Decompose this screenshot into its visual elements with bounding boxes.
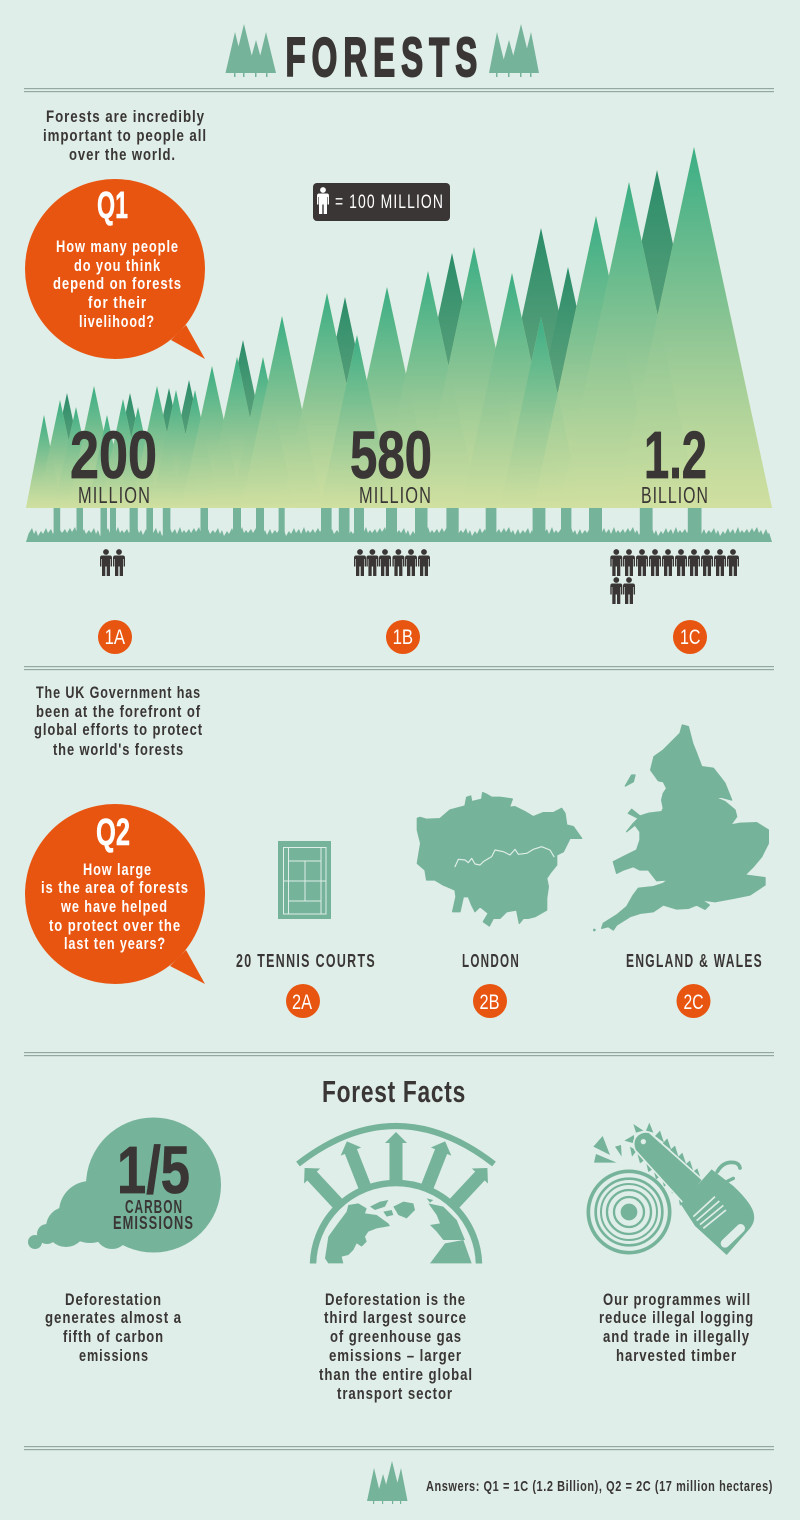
icon: carbon cloud: 1/5 [117,1133,190,1208]
question bubble Q2: to protect over the [49,916,181,935]
value 580 million: MILLION [359,482,432,508]
question bubble Q1: How many people [56,237,179,256]
fact text: greenhouse gas source: Deforestation is the [325,1290,466,1309]
fact text: greenhouse gas source: transport sector [337,1384,453,1403]
question bubble Q2: is the area of forests [41,878,189,897]
fact text: greenhouse gas source: of greenhouse gas [330,1327,462,1346]
option badge 2A: 2A [292,991,312,1014]
value 580 million: 580 [350,418,432,493]
people row 1C [610,549,739,604]
fact text: fifth of carbon emissions: generates almost a [45,1308,182,1327]
option badge 2B [473,984,507,1018]
label: London: LONDON [462,950,520,971]
icon: carbon cloud [28,1118,221,1252]
intro text: over the world. [69,145,176,164]
value 200 million: 200 [70,418,157,493]
fact text: fifth of carbon emissions: emissions [79,1346,149,1365]
UK government text: been at the forefront of [36,702,201,721]
question bubble Q2: we have helped [60,897,168,916]
option badge 1A [98,620,132,654]
forest chart [26,147,772,508]
icon: chainsaw and tree rings [588,1123,754,1255]
question bubble Q1: depend on forests [53,274,182,293]
question bubble Q2: last ten years? [64,934,166,953]
value 1.2 billion [641,418,709,508]
question bubble Q1: Q1 [97,185,128,227]
option badge 1B: 1B [393,626,413,649]
fact text: greenhouse gas source: third largest source [324,1308,467,1327]
value 200 million: MILLION [78,482,151,508]
value 580 million [350,418,432,508]
question bubble Q2 [25,804,205,984]
option badge 1A: 1A [105,626,125,649]
value 1.2 billion: BILLION [641,482,709,508]
question bubble Q2: Q2 [96,812,130,854]
option badge 1B [386,620,420,654]
UK government text [34,683,203,759]
people row 1B [354,549,430,576]
fact text: illegal logging [599,1290,754,1365]
map: London [417,793,582,926]
header trees left [226,24,276,77]
value 1.2 billion: 1.2 [644,418,707,493]
fact text: greenhouse gas source [319,1290,473,1403]
option badge 2B: 2B [480,991,500,1014]
intro text [43,107,207,164]
value 200 million [70,418,157,508]
fact text: illegal logging: harvested timber [616,1346,737,1365]
icon: carbon cloud: EMISSIONS [113,1213,194,1233]
fact text: fifth of carbon emissions: Deforestation [65,1290,162,1309]
label: 20 tennis courts: 20 TENNIS COURTS [236,950,376,971]
icon: carbon cloud: CARBON [125,1197,183,1217]
fact text: fifth of carbon emissions [45,1290,182,1365]
UK government text: global efforts to protect [34,720,203,739]
fact text: illegal logging: reduce illegal logging [599,1308,754,1327]
option badge 2C [676,984,710,1018]
icon: tennis court [278,841,331,919]
question bubble Q2: How large [83,860,152,879]
fact text: greenhouse gas source: than the entire global [319,1365,473,1384]
footer trees [367,1461,408,1504]
question bubble Q1: livelihood? [79,312,155,331]
UK government text: The UK Government has [36,683,201,702]
legend: one figure equals 100 million [313,183,450,221]
fact text: greenhouse gas source: emissions – larger [329,1346,462,1365]
option badge 1C [673,620,707,654]
question bubble Q1 [25,179,205,359]
intro text: Forests are incredibly [46,107,205,126]
question bubble Q1: do you think [74,256,161,275]
fact text: illegal logging: Our programmes will [603,1290,751,1309]
tree trunks and ground [26,508,772,542]
people row 1A [100,549,125,576]
option badge 2A [286,984,320,1018]
heading: Forest Facts: Forest Facts [322,1074,466,1109]
title: FORESTS [286,26,483,88]
map: England and Wales [594,725,768,931]
header trees right [489,24,539,77]
option badge 1C: 1C [680,626,700,649]
legend: one figure equals 100 million: = 100 MILLION [335,192,444,213]
UK government text: the world's forests [53,740,184,759]
intro text: important to people all [43,126,207,145]
fact text: illegal logging: and trade in illegally [603,1327,750,1346]
fact text: fifth of carbon emissions: fifth of carbon [63,1327,164,1346]
question bubble Q1: for their [88,293,147,312]
option badge 2C: 2C [684,991,704,1014]
icon: globe with arrows [296,1122,496,1264]
